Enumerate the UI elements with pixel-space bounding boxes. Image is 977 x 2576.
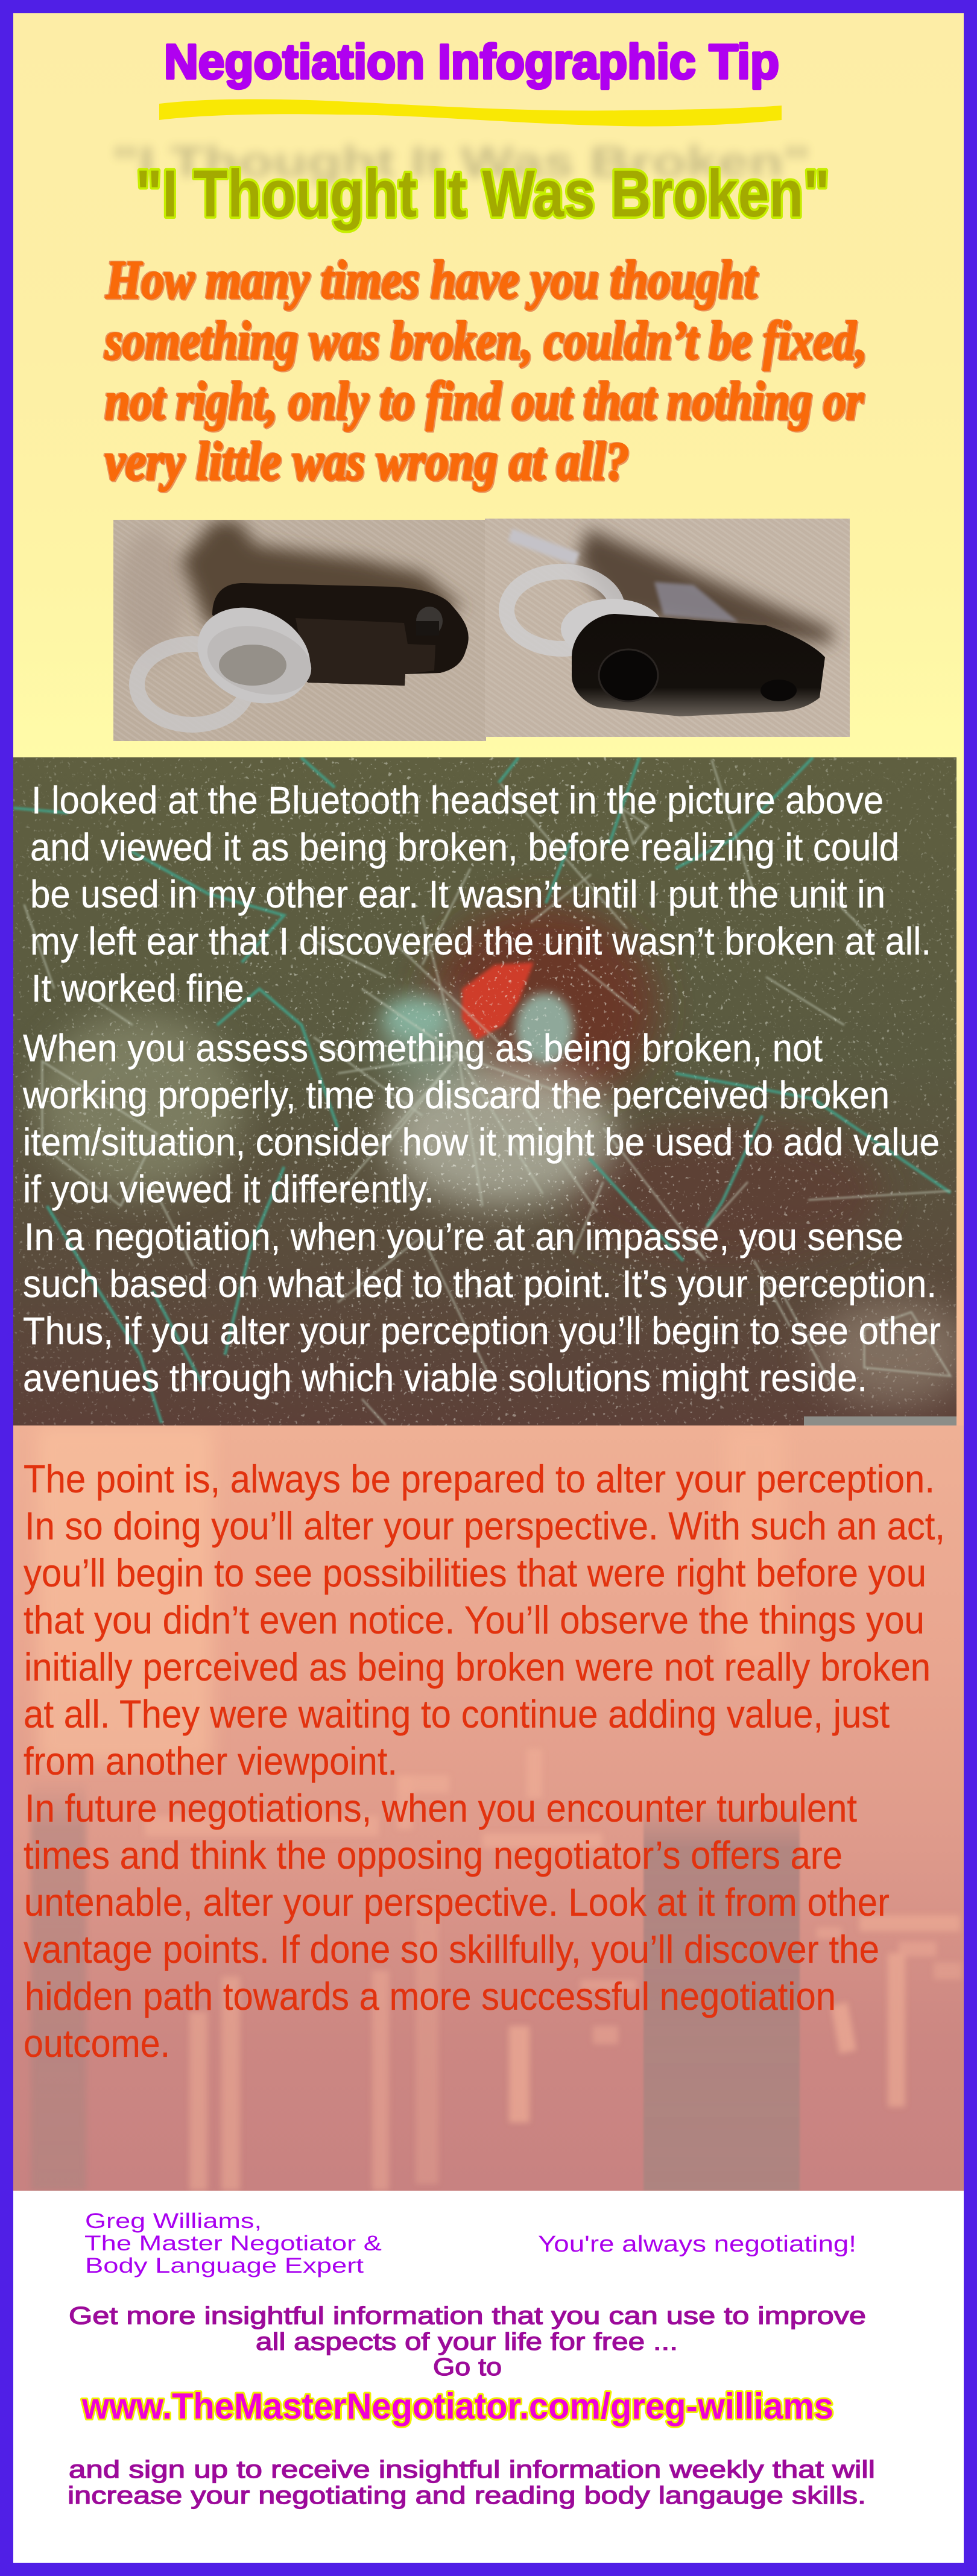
text: always alter perception: from another viewpoint.: [24, 1739, 397, 1783]
text: future negotiations: hidden path towards a more successful negotiation: [25, 1974, 836, 2018]
panel: footer: [13, 2191, 964, 2563]
panel: broken glass story: [13, 757, 971, 1425]
sign up text: and sign up to receive insightful information weekly that will: [69, 2455, 875, 2483]
text: alter perception: if you viewed it differently.: [23, 1167, 434, 1211]
text: alter perception: working properly, time to discard the perceived broken: [22, 1073, 890, 1117]
sign up text: increase your negotiating and reading body langauge skills.: [68, 2481, 866, 2509]
intro question: How many times have you thought: [106, 250, 758, 310]
text: always alter perception: that you didn’t even notice. You’ll observe the things you: [24, 1598, 925, 1642]
text: headset story: It worked fine.: [31, 967, 254, 1010]
text: future negotiations: outcome.: [24, 2021, 170, 2065]
text: headset story: I looked at the Bluetooth headset in the picture above: [31, 778, 884, 822]
text: always alter perception: you’ll begin to see possibilities that were right before you: [24, 1551, 926, 1595]
text: future negotiations: [24, 1786, 890, 2065]
title: Negotiation Infographic Tip: [164, 35, 779, 89]
text: alter perception: item/situation, consider how it might be used to add value: [23, 1120, 940, 1164]
yellow wavy underline: [159, 99, 782, 127]
author credit: Greg Williams,: [85, 2209, 262, 2233]
website link: www.TheMasterNegotiator.com/greg-williams: [81, 2386, 833, 2426]
intro question: very little was wrong at all?: [105, 432, 629, 491]
text: future negotiations: In future negotiations, when you encounter turbulent: [25, 1786, 857, 1830]
heading shadow: "I Thought It Was Broken": [112, 139, 810, 186]
text: future negotiations: untenable, alter your perspective. Look at it from other: [24, 1880, 890, 1924]
text: always alter perception: at all. They were waiting to continue adding value, just: [24, 1692, 890, 1736]
text: alter perception: In a negotiation, when you’re at an impasse, you sense: [24, 1215, 903, 1258]
photo: headset, button side: [485, 519, 850, 737]
heading: "I Thought It Was Broken": [136, 157, 830, 231]
text: alter perception: such based on what led to that point. It’s your perception.: [23, 1262, 937, 1305]
text: future negotiations: vantage points. If done so skillfully, you’ll discover the: [24, 1927, 879, 1971]
call to action: [69, 2302, 866, 2381]
intro question: [104, 250, 867, 491]
blurred street background: [13, 1425, 964, 2191]
author credit: Body Language Expert: [85, 2254, 364, 2278]
sign up text: [68, 2455, 875, 2509]
text: headset story: and viewed it as being broken, before realizing it could: [30, 826, 899, 869]
text: alter perception: When you assess something as being broken, not: [23, 1026, 823, 1070]
photo: headset, speaker side: [113, 520, 486, 741]
tagline: You're always negotiating!: [538, 2232, 856, 2257]
panel: yellow header: [13, 13, 964, 1425]
text: headset story: be used in my other ear. It wasn’t until I put the unit in: [30, 873, 885, 916]
broken glass background: [13, 757, 971, 1425]
panel: perspective advice: [13, 1425, 964, 2191]
text: headset story: [30, 778, 931, 1010]
text: future negotiations: times and think the opposing negotiator’s offers are: [24, 1833, 843, 1877]
author credit: [84, 2209, 382, 2278]
text: alter perception: Thus, if you alter your perception you’ll begin to see other: [23, 1309, 941, 1353]
text: alter perception: [22, 1026, 941, 1400]
text: headset story: my left ear that I discovered the unit wasn’t broken at all.: [30, 920, 931, 963]
text: always alter perception: [24, 1457, 945, 1783]
call to action: Get more insightful information that you can use to improve: [69, 2302, 866, 2329]
text: alter perception: avenues through which viable solutions might reside.: [23, 1356, 867, 1400]
author credit: The Master Negotiator &: [84, 2232, 382, 2255]
call to action: Go to: [433, 2353, 502, 2381]
call to action: all aspects of your life for free ...: [256, 2328, 678, 2355]
